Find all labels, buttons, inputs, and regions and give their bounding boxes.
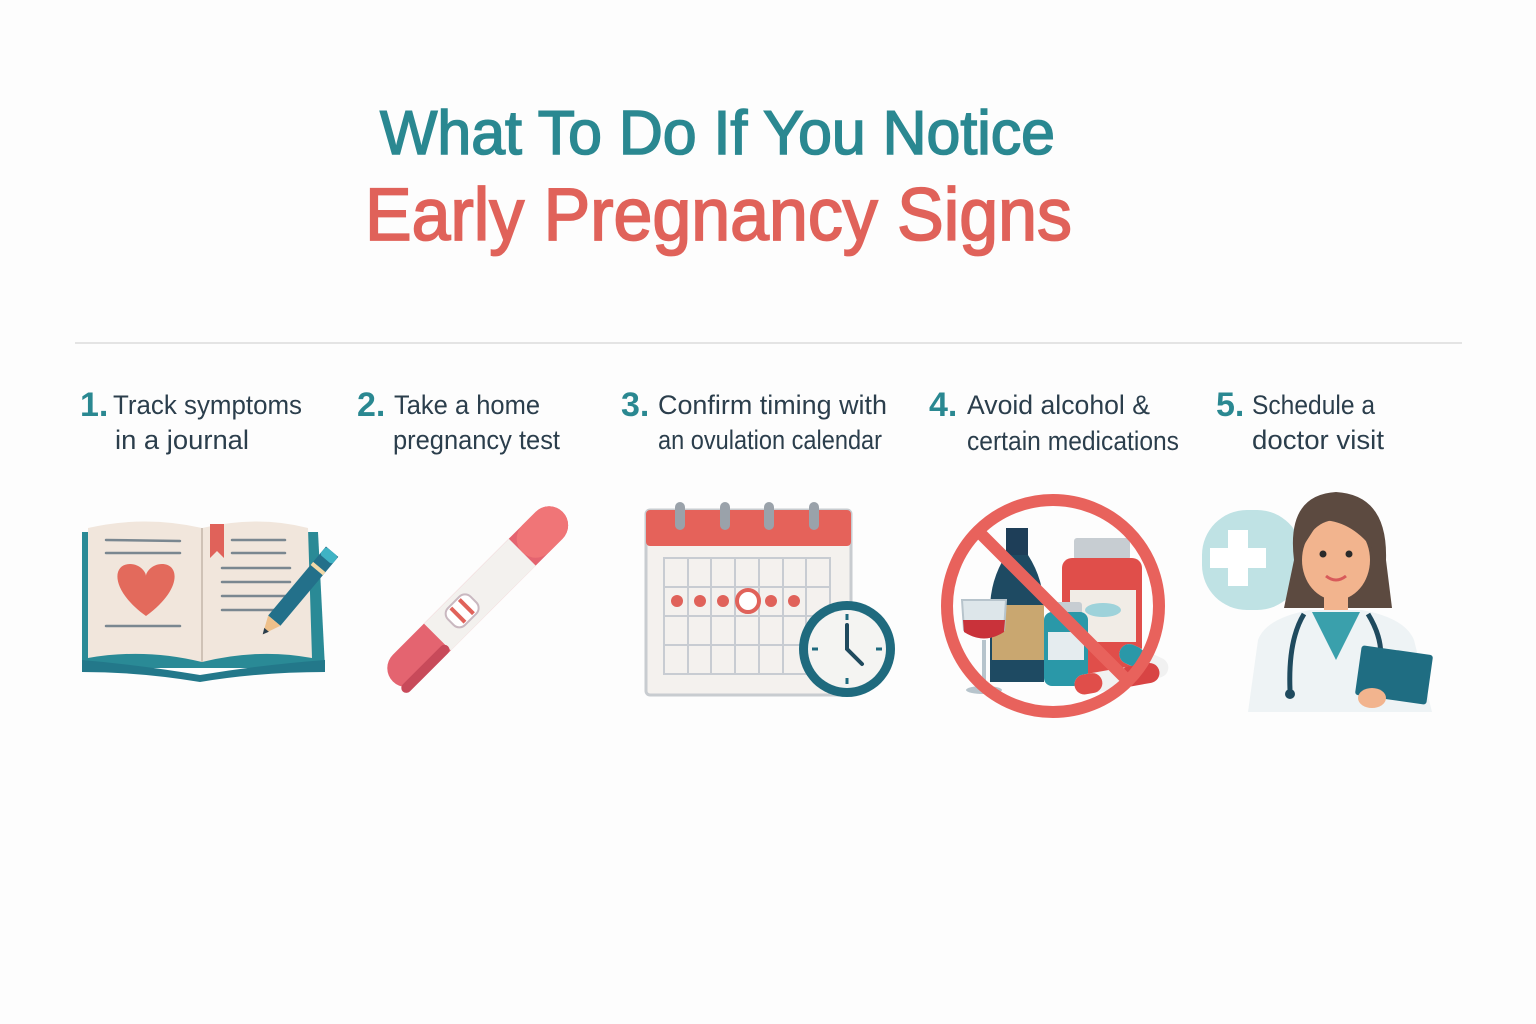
step 3 label: an ovulation calendar <box>658 425 882 455</box>
step 2 label: pregnancy test <box>393 425 560 455</box>
step 3 label: Confirm timing with <box>658 390 887 420</box>
title: What To Do If You Notice <box>380 99 1055 168</box>
step 1 label: 1. <box>80 386 108 424</box>
icon: journal <box>82 522 338 682</box>
title: Early Pregnancy Signs <box>365 173 1072 256</box>
step 3 label <box>621 386 887 455</box>
step 2 label: Take a home <box>394 390 540 420</box>
step 5 label: 5. <box>1216 386 1244 424</box>
step 5 label <box>1216 386 1385 455</box>
step 5 label: Schedule a <box>1252 390 1376 420</box>
icon: pregnancy test <box>379 498 576 695</box>
step 1 label <box>80 386 302 455</box>
step 2 label <box>357 386 560 455</box>
icon: doctor <box>1202 492 1433 712</box>
icon: calendar with clock <box>646 502 895 697</box>
step 4 label: Avoid alcohol & <box>967 390 1150 420</box>
step 4 label <box>929 386 1179 456</box>
step 1 label: in a journal <box>115 425 249 455</box>
step 4 label: 4. <box>929 386 957 424</box>
step 5 label: doctor visit <box>1252 425 1385 455</box>
title <box>365 99 1072 256</box>
icon: no alcohol or medication <box>947 500 1172 712</box>
step 4 label: certain medications <box>967 426 1179 456</box>
step 1 label: Track symptoms <box>113 390 302 420</box>
step 3 label: 3. <box>621 386 649 424</box>
step 2 label: 2. <box>357 386 385 424</box>
